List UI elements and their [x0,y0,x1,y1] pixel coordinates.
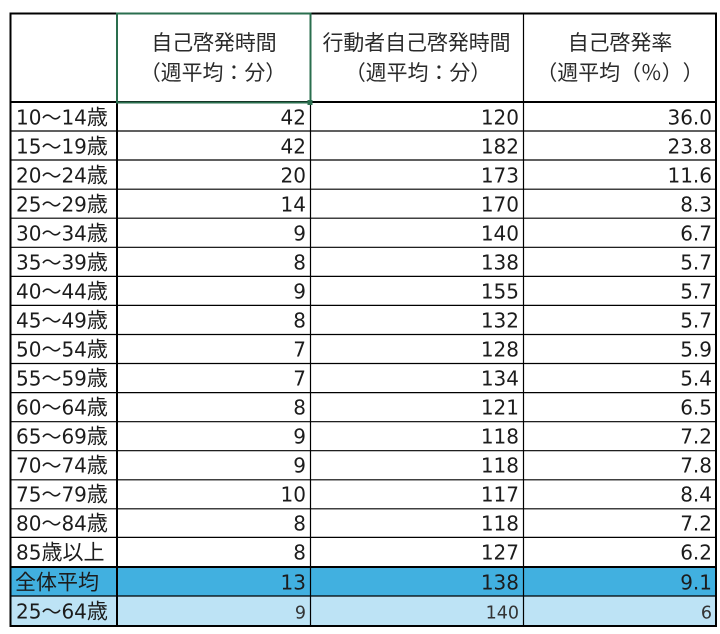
row 25-64: 25～64歳 [16,596,108,626]
row 65-69: 7.2 [680,424,712,448]
header: self-development time [140,27,286,87]
row 50-54: 5.9 [680,338,712,362]
row 35-39: 5.7 [680,250,712,274]
row 25-29: 25～29歳 [16,188,108,218]
row 45-49: 5.7 [680,308,712,332]
row 55-59: 5.4 [680,366,712,390]
row 75-79: 8.4 [680,482,712,506]
row 15-19: 15～19歳 [16,130,108,160]
row 85 and over: 6.2 [680,540,712,564]
row 65-69 [16,420,712,450]
row 60-64: 60～64歳 [16,392,108,422]
row 45-49: 45～49歳 [16,304,108,334]
header: self-development rate: 自己啓発率 [568,27,672,57]
row 40-44: 40～44歳 [16,276,108,306]
row 25-29: 170 [481,192,519,216]
row 10-14 [16,102,712,132]
row overall average [15,566,712,596]
row 50-54 [16,334,712,364]
row overall average: 全体平均 [15,566,99,596]
row 15-19: 182 [481,134,519,158]
row 45-49: 132 [481,308,519,332]
row 20-24: 20～24歳 [16,160,108,190]
row overall average: 13 [281,570,306,594]
row overall average: 9.1 [680,570,712,594]
row 40-44: 9 [293,280,306,304]
row 50-54: 128 [481,338,519,362]
row 55-59: 7 [293,366,306,390]
row 20-24: 11.6 [667,164,712,188]
row 60-64: 8 [293,396,306,420]
row 15-19: 23.8 [667,134,712,158]
row 30-34 [16,218,712,248]
header: participant self-development time [322,27,511,87]
row 30-34: 140 [481,222,519,246]
row 85 and over [16,536,712,566]
header: self-development rate [536,27,704,87]
row 70-74: 7.8 [680,454,712,478]
header: self-development time: 自己啓発時間 [151,27,277,57]
selected header cell outline [117,14,312,105]
row 60-64: 121 [481,396,519,420]
row 10-14: 10～14歳 [16,102,108,132]
row 65-69: 9 [293,424,306,448]
row 45-49 [16,304,712,334]
row 80-84: 8 [293,512,306,536]
row 70-74: 9 [293,454,306,478]
row 20-24 [16,160,712,190]
row 20-24: 20 [281,164,306,188]
row 35-39: 8 [293,250,306,274]
row 75-79 [16,478,712,508]
row 80-84: 7.2 [680,512,712,536]
header: self-development rate: （週平均（％）） [536,57,704,87]
row 50-54: 50～54歳 [16,334,108,364]
row 45-49: 8 [293,308,306,332]
row 70-74: 70～74歳 [16,450,108,480]
row 25-29: 8.3 [680,192,712,216]
row 80-84 [16,508,712,538]
row 35-39: 35～39歳 [16,246,108,276]
row 85 and over: 8 [293,540,306,564]
header: participant self-development time: （週平均：分） [345,57,491,87]
row 30-34: 6.7 [680,222,712,246]
row 80-84: 118 [481,512,519,536]
row 60-64 [16,392,712,422]
row 70-74 [16,450,712,480]
row 30-34: 30～34歳 [16,218,108,248]
row 55-59: 134 [481,366,519,390]
row 85 and over: 127 [481,540,519,564]
header: self-development time: （週平均：分） [140,57,286,87]
row 10-14: 120 [481,106,519,130]
row 10-14: 36.0 [667,106,712,130]
summary band: overall average [10,567,716,596]
row 85 and over: 85歳以上 [16,536,104,566]
row 65-69: 65～69歳 [16,420,108,450]
summary band: ages 25 to 64 [10,596,716,626]
row 65-69: 118 [481,424,519,448]
row 75-79: 75～79歳 [16,478,108,508]
row 25-29: 14 [281,192,306,216]
row 40-44: 5.7 [680,280,712,304]
row 30-34: 9 [293,222,306,246]
row 50-54: 7 [293,338,306,362]
row 25-29 [16,188,712,218]
header: participant self-development time: 行動者自己啓発時間 [322,27,511,57]
row 25-64 [16,596,712,626]
row 15-19: 42 [281,134,306,158]
row 55-59: 55～59歳 [16,362,108,392]
row 75-79: 117 [481,482,519,506]
row 75-79: 10 [281,482,306,506]
row 35-39 [16,246,712,276]
row 70-74: 118 [481,454,519,478]
row 15-19 [16,130,712,160]
row 25-64: 6 [701,604,712,624]
row 80-84: 80～84歳 [16,508,108,538]
row overall average: 138 [481,570,519,594]
row 25-64: 140 [486,604,519,624]
row 35-39: 138 [481,250,519,274]
row 60-64: 6.5 [680,396,712,420]
row 10-14: 42 [281,106,306,130]
row 40-44: 155 [481,280,519,304]
row 40-44 [16,276,712,306]
row 25-64: 9 [295,604,306,624]
row 55-59 [16,362,712,392]
row 20-24: 173 [481,164,519,188]
